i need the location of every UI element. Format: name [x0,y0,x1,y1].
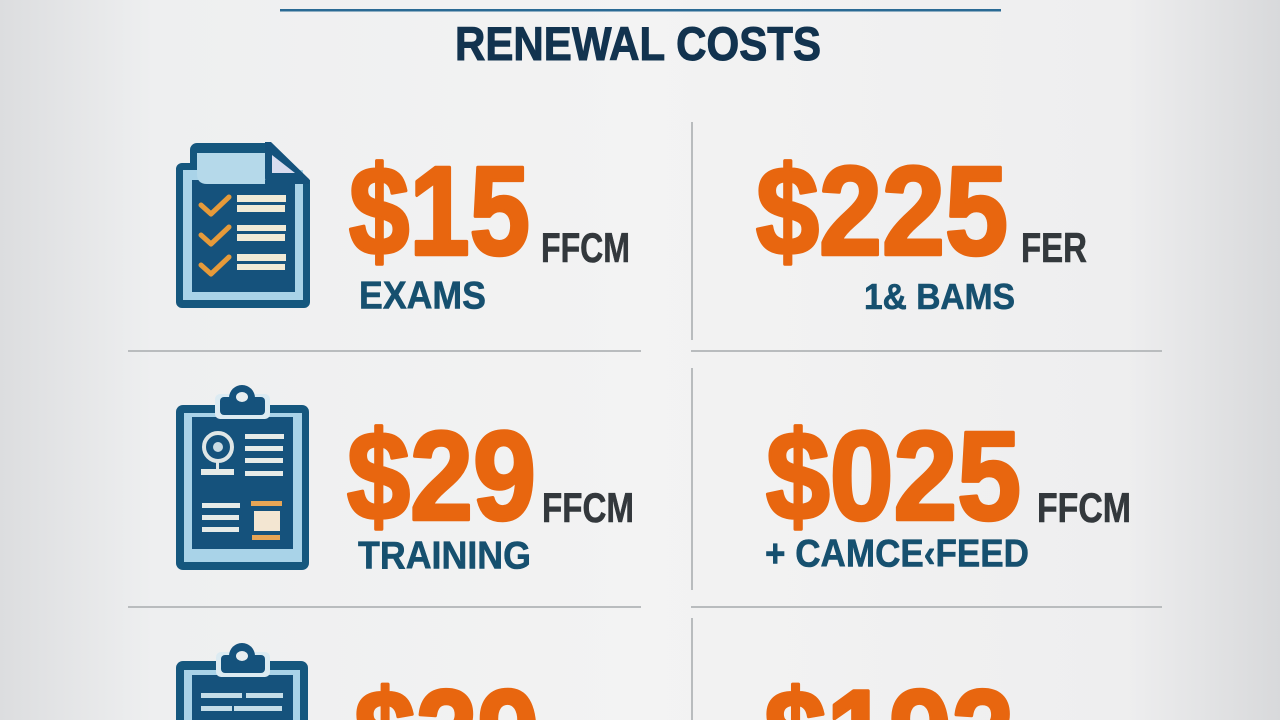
panel: second exam cost [756,140,1087,317]
price: $29: $29 [347,406,536,546]
label: exams: EXAMS [359,274,486,318]
unit: FER: FER [1021,224,1087,271]
panel: cancel fee cost [765,406,1131,576]
unit: FFCM: FFCM [541,224,630,271]
unit: FFCM: FFCM [542,484,634,531]
price: $025: $025 [766,406,1021,546]
title: RENEWAL COSTS [455,17,821,70]
label: training: TRAINING [358,534,531,578]
unit: FFCM: FFCM [1037,484,1131,531]
label: BAMS: 1& BAMS [864,276,1015,317]
icon: training clipboard [176,385,309,570]
panel: third row left [176,643,539,720]
panel: exams cost [176,140,630,318]
icon: exam checklist document [176,142,310,308]
price: $225: $225 [756,140,1008,282]
grid dividers [128,122,1162,720]
panel: training cost [176,385,634,578]
title rule [280,9,1001,12]
icon: clipboard [176,643,308,720]
price: $15: $15 [349,140,530,282]
label: cancel fee: + CAMCE‹FEED [765,532,1029,576]
